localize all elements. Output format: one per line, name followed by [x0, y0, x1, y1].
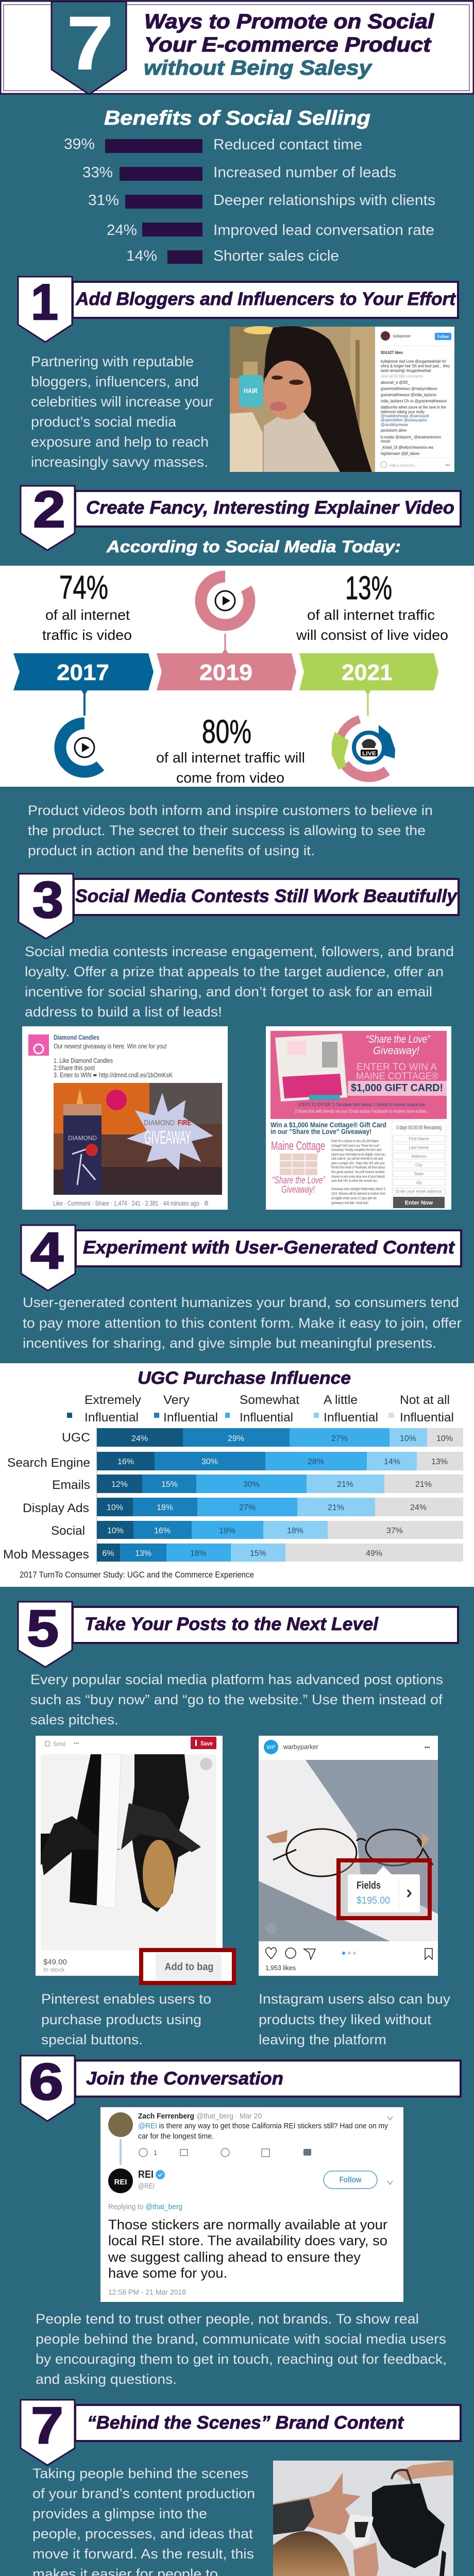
row: search engine: 13% — [431, 1458, 448, 1466]
image: maine cottage giveaway page: submit your information to be eligible. Once you — [331, 1153, 385, 1157]
influencer instagram post image: bathroom taking your molly — [381, 410, 425, 414]
image: maine cottage giveaway page: 0 days 00:00:00 Remaining — [396, 1125, 442, 1131]
row: social: 10% — [107, 1527, 124, 1535]
image: maine cottage giveaway page: Address — [411, 1154, 427, 1159]
section 6 text: and asking questions. — [36, 2371, 177, 2387]
image: tweet conversation: Those stickers are normally available at your — [108, 2217, 387, 2232]
row: search engine: 30% — [201, 1458, 218, 1466]
image: maine cottage giveaway page: Zip — [416, 1180, 422, 1185]
image: instagram shopping post: ••• — [425, 1745, 430, 1751]
chart legend: A little — [324, 1393, 358, 1407]
chart legend: Influential — [163, 1411, 218, 1425]
image: tweet conversation: Follow — [339, 2176, 362, 2184]
section 5 banner: Take Your Posts to the Next Level — [84, 1614, 379, 1634]
section 7 text: move it forward. As the result, this — [32, 2546, 254, 2562]
image: tweet conversation: @that_berg · Mar 20 — [196, 2112, 262, 2121]
benefits bar chart: Shorter sales cicle — [213, 248, 339, 264]
image: maine cottage giveaway page: Giveaway! Simply complete the form and — [331, 1148, 381, 1152]
influencer instagram post image: kyliejenner — [393, 334, 411, 338]
benefits bar chart: Deeper relationships with clients — [213, 192, 435, 209]
image: maine cottage giveaway page: Enter Now — [405, 1200, 433, 1206]
row labels: UGC — [62, 1431, 90, 1445]
row labels: Display Ads — [23, 1501, 89, 1515]
image: maine cottage giveaway page: in our "Share the Love" Giveaway! — [270, 1127, 371, 1136]
influencer instagram post image: @randkitymeow — [381, 422, 408, 427]
row: search engine: 16% — [117, 1458, 134, 1466]
main title — [144, 10, 434, 79]
caption: pinterest: special buttons. — [41, 2032, 143, 2047]
influencer instagram post image: ••• — [445, 463, 450, 468]
benefits bar chart: Improved lead conversation rate — [213, 222, 434, 239]
image: tweet conversation: car for the longest time. — [138, 2132, 214, 2141]
section 7 text: people, processes, and ideas that — [32, 2526, 253, 2541]
image: diamond candles giveaway post: DIAMOND — [144, 1118, 175, 1127]
image: tweet conversation: have some for you. — [108, 2265, 227, 2281]
row: mob messages: 15% — [250, 1549, 266, 1558]
influencer instagram post image: b.rosdas @slayann_ @amairantrevino — [381, 435, 441, 439]
row labels: Search Engine — [7, 1456, 90, 1470]
image: diamond candles giveaway post: GIVEAWAY — [144, 1127, 191, 1148]
row: social — [97, 1521, 463, 1539]
row labels — [3, 1431, 90, 1562]
section 1 banner: Add Bloggers and Influencers to Your Effort — [75, 289, 456, 309]
influencer instagram post image: graciematthewsxx @india_taylorxx — [381, 393, 436, 397]
stat 74% — [42, 569, 132, 643]
image: maine cottage giveaway page: uses that URL to enter the contest too. — [331, 1179, 378, 1183]
section 2 text: the product. The secret to their success is allowing to see the — [28, 823, 426, 838]
image: instagram shopping post: Fields — [357, 1880, 381, 1891]
row: mob messages: 18% — [190, 1549, 207, 1558]
section 7 text — [32, 2466, 255, 2576]
row: social: 37% — [386, 1527, 403, 1535]
section 7 banner: “Behind the Scenes” Brand Content — [87, 2413, 404, 2433]
chart legend: Influential — [84, 1411, 139, 1425]
main title: Your E-commerce Product — [144, 33, 432, 56]
icon: 2017 video donut — [60, 690, 100, 772]
image: instagram shopping post: 1,953 likes — [265, 1964, 296, 1972]
row: emails: 21% — [337, 1480, 353, 1489]
image: diamond candles giveaway post: 2.Share this post — [54, 1064, 95, 1072]
row: UGC: 27% — [331, 1434, 348, 1443]
chart legend: Influential — [240, 1411, 293, 1425]
caption: instagram: Instagram users also can buy — [259, 1991, 451, 2007]
section 4 banner: Experiment with User-Generated Content — [83, 1238, 455, 1258]
image: maine cottage giveaway page: chance to win every time one of your friends — [331, 1175, 385, 1179]
section 3 text — [25, 944, 454, 1020]
influencer instagram post image: peckstorm dime — [381, 428, 407, 433]
image: tweet conversation — [100, 2107, 403, 2302]
image: maine cottage giveaway page: Giveaway! — [373, 1045, 419, 1057]
section 6 text: by encouraging them to get in touch, reaching out for feedback, — [36, 2351, 447, 2367]
image: maine cottage giveaway page: Giveaway ends midnight Wednesday, March 5, — [331, 1188, 386, 1191]
stat 13% — [296, 569, 448, 643]
section 5 text: Every popular social media platform has advanced post options — [30, 1672, 443, 1687]
main title: without Being Salesy — [144, 57, 373, 79]
row: display ads: 18% — [157, 1503, 173, 1512]
image: diamond candles giveaway post: Diamond Candles — [54, 1033, 99, 1041]
image: maine cottage giveaway page: all eligible entries seven (7) days after the — [331, 1197, 377, 1200]
image: tweet conversation: REI — [114, 2178, 127, 2187]
row: emails: 30% — [243, 1480, 260, 1489]
image: maine cottage giveaway page: State — [414, 1172, 424, 1176]
section 1 banner — [18, 274, 458, 342]
benefits bar chart: Reduced contact time — [213, 137, 362, 153]
stat 13%: of all internet traffic — [307, 607, 435, 623]
section 6 banner — [21, 2053, 461, 2121]
section 1 text: increasingly savvy masses. — [31, 454, 208, 470]
row: display ads: 24% — [410, 1503, 427, 1512]
image: diamond candles giveaway post: DIAMOND — [68, 1134, 97, 1142]
image: tweet conversation: we suggest calling ahead to ensure they — [108, 2249, 361, 2265]
row: social: 16% — [154, 1527, 171, 1535]
image: pinterest buyable pin: Add to bag — [165, 1961, 213, 1973]
video stats timeline panel — [0, 566, 474, 787]
influencer instagram post image: Follow — [437, 334, 449, 339]
image: diamond candles giveaway post: Like · Comment · Share · 1,474 · 241 · 2,381 · 44 minutes ago · ⚙ — [53, 1199, 209, 1207]
image: tweet conversation: @REI is there any way to get those California REI stickers still? Had one on my — [138, 2122, 388, 2130]
image: instagram shopping post: $195.00 — [357, 1895, 390, 1906]
section 7 banner — [21, 2397, 461, 2465]
chart legend: Not at all — [400, 1393, 450, 1407]
influencer instagram post image: mood — [381, 439, 390, 444]
section 1 text: product’s social media — [31, 414, 176, 430]
stat 80%: of all internet traffic will — [156, 750, 305, 766]
section 4 banner: 4 — [30, 1222, 63, 1280]
section 5 text: such as “buy now” and “go to the website.” Use them instead of — [30, 1692, 443, 1707]
benefits bar chart: 31% — [88, 192, 119, 209]
caption: pinterest: Pinterest enables users to — [41, 1991, 211, 2007]
section 3 text: Social media contests increase engagement, followers, and brand — [25, 944, 454, 959]
caption: instagram: leaving the platform — [259, 2032, 386, 2047]
section 3 text: address to build a list of leads! — [25, 1004, 222, 1020]
image: tweet conversation: Replying to @that_berg — [108, 2202, 182, 2211]
image: maine cottage giveaway page: First Name — [409, 1137, 429, 1141]
image: maine cottage giveaway page: Maine Cottage — [271, 1139, 325, 1153]
row: mob messages — [97, 1544, 463, 1562]
arrow 2021 — [299, 653, 438, 690]
section 6 text: people behind the brand, communicate with social media users — [36, 2331, 446, 2347]
caption: pinterest — [41, 1991, 211, 2047]
image: diamond candles giveaway post: 1. Like Diamond Candles — [54, 1057, 113, 1064]
image: maine cottage giveaway page: Cottage® Gift Card in our "Share the Love" — [331, 1144, 380, 1148]
chart legend: Influential — [324, 1411, 378, 1425]
image: tweet conversation: 12:58 PM - 21 Mar 2018 — [108, 2288, 186, 2297]
arrow 2019: 2019 — [199, 660, 252, 685]
section 3 text: loyalty. Offer a prize that appeals to the target audience, offer an — [25, 964, 444, 979]
stat 80%: come from video — [176, 770, 284, 786]
header panel — [1, 1, 473, 94]
row: mob messages: 49% — [366, 1549, 382, 1558]
section 7 banner: 7 — [31, 2397, 63, 2454]
image: maine cottage giveaway page: 3 Share link with friends via your Email and/or Facebook to receive more entries. — [295, 1109, 428, 1114]
influencer instagram post image — [230, 326, 454, 472]
image: tweet conversation: local REI store. The availability does vary, so — [108, 2233, 387, 2248]
section 3 banner — [19, 871, 459, 939]
section 3 banner: Social Media Contests Still Work Beautifully — [75, 886, 458, 906]
image: diamond candles giveaway post — [22, 1026, 228, 1210]
section 1 text: bloggers, influencers, and — [31, 374, 199, 389]
image: pinterest buyable pin — [36, 1736, 236, 1985]
section 7 text: provides a glimpse into the — [32, 2506, 207, 2521]
stat 74%: of all internet — [45, 607, 130, 623]
image: maine cottage giveaway page: friends thru email or Facebook, tell them about — [331, 1166, 385, 1170]
stat 74%: 74% — [59, 569, 108, 606]
arrow 2017 — [13, 653, 154, 690]
section 5 text: sales pitches. — [30, 1712, 118, 1727]
benefits heading: Benefits of Social Selling — [104, 107, 370, 129]
row: UGC: 10% — [400, 1434, 416, 1443]
row: UGC: 29% — [228, 1434, 244, 1443]
section 7 text: of your brand’s content production — [32, 2486, 255, 2501]
image: diamond candles giveaway post: 3. Enter to WIN ➨ http://dmnd.cndl.es/1bOmKsK — [54, 1071, 173, 1079]
image: maine cottage giveaway page: MAINE COTTAGE® — [356, 1071, 438, 1082]
image: maine cottage giveaway page: STEPS TO ENTER: 1 Complete form below. 2 Submit to receive unique link. — [298, 1102, 426, 1107]
section 1 text: Partnering with reputable — [31, 353, 194, 369]
section 2 banner — [21, 481, 461, 550]
row: search engine — [97, 1452, 463, 1470]
image: tweet conversation: @REI — [138, 2182, 155, 2191]
section 4 banner — [21, 1222, 461, 1291]
row: display ads — [97, 1498, 463, 1516]
row: UGC — [97, 1428, 463, 1447]
image: behind the scenes photo — [273, 2461, 453, 2576]
image: tweet conversation: Zach Ferrenberg — [138, 2112, 194, 2121]
influencer instagram post image: highlamsam @jill_labow — [381, 451, 419, 456]
section 1 text — [31, 353, 213, 470]
influencer instagram post image: india_tayloexx Oh xx @graciematthewsxx — [381, 399, 447, 403]
image: maine cottage giveaway page: ENTER TO WIN A — [357, 1062, 437, 1073]
image: tweet conversation: REI — [138, 2169, 154, 2180]
image: pinterest buyable pin: Save — [200, 1740, 213, 1747]
arrow 2017: 2017 — [57, 660, 109, 685]
influencer instagram post image: aboorah_e @35f_ — [381, 380, 410, 385]
influencer instagram post image: dabburrito when youre at the rave in the — [381, 405, 446, 410]
arrow 2021: 2021 — [342, 660, 393, 685]
panel: ugc purchase influence — [0, 1363, 474, 1587]
influencer instagram post image: _kristal_18 @kellyncheavarria vea — [380, 445, 433, 450]
influencer instagram post image: HAIR — [244, 387, 258, 395]
row: search engine: 14% — [384, 1458, 400, 1466]
row: display ads: 10% — [107, 1503, 123, 1512]
section 6 text: People tend to trust other people, not brands. To show real — [36, 2311, 419, 2327]
section 2 text: Product videos both inform and inspire customers to believe in — [28, 803, 433, 818]
benefits bar chart: 24% — [107, 222, 137, 239]
influencer instagram post image: view all 50,999 comments — [381, 374, 423, 379]
benefits bar chart: 14% — [126, 248, 157, 264]
row: display ads: 21% — [328, 1503, 344, 1512]
section 1 text: celebrities will increase your — [31, 394, 213, 410]
image: instagram shopping post: WP — [266, 1744, 276, 1751]
benefits bar chart — [64, 136, 435, 264]
stat 74%: traffic is video — [42, 627, 132, 643]
section 4 text: User-generated content humanizes your brand, so consumers tend — [23, 1295, 459, 1310]
header ribbon with number 7 — [52, 1, 126, 94]
chart legend: Very — [163, 1393, 190, 1407]
row: mob messages: 6% — [102, 1549, 114, 1558]
image: maine cottage giveaway page: 2014. Winners will be selected at random from — [331, 1192, 385, 1196]
chart axis line — [96, 1427, 97, 1564]
section 2 text: product in action and the benefits of using it. — [28, 843, 315, 858]
row: social: 18% — [287, 1527, 303, 1535]
section 1 banner: 1 — [31, 274, 58, 330]
influencer instagram post image: graciematthewsxx @maisyrobbsxx — [381, 386, 437, 391]
influencer instagram post image: taste amazing! #sugarbearhair — [381, 368, 431, 373]
stacked bars — [97, 1428, 463, 1562]
row: emails: 21% — [415, 1480, 432, 1489]
row: emails: 12% — [111, 1480, 128, 1489]
row: mob messages: 13% — [135, 1549, 151, 1558]
section 2 banner: 2 — [33, 481, 65, 538]
image: instagram shopping post — [259, 1736, 438, 1976]
image: pinterest buyable pin: ••• — [74, 1741, 79, 1747]
benefits bar chart: 39% — [64, 136, 95, 152]
row: search engine: 28% — [308, 1458, 324, 1466]
benefits bar chart: 33% — [82, 164, 113, 181]
benefits bar chart: Increased number of leads — [213, 164, 396, 181]
influencer instagram post image: 924,627 likes — [381, 350, 403, 355]
image: pinterest buyable pin: $49.00 — [43, 1958, 67, 1967]
section 6 banner: 6 — [29, 2053, 63, 2111]
section 5 text — [30, 1672, 443, 1727]
row: UGC: 10% — [436, 1434, 453, 1443]
section 4 text: incentives for sharing, and give simple but meaningful presents. — [23, 1335, 436, 1351]
row labels: Social — [51, 1524, 85, 1538]
chart title: UGC Purchase Influence — [138, 1368, 351, 1388]
image: maine cottage giveaway page: Last Name — [409, 1145, 429, 1150]
section 4 text: to pay more attention to this content form. Make it easy to join, offer — [23, 1315, 462, 1331]
section 3 banner: 3 — [32, 871, 63, 929]
section 5 banner: 5 — [27, 1600, 59, 1657]
icon: 2019 video donut — [201, 577, 249, 653]
image: maine cottage giveaway page: “Share the Love” — [272, 1175, 326, 1186]
image: maine cottage giveaway page: $1,000 GIFT CARD! — [351, 1082, 443, 1094]
influencer instagram post image: Add a comment... — [390, 463, 417, 468]
image: maine cottage giveaway page: click submit, you will be entered to win and — [331, 1157, 383, 1161]
row: UGC: 24% — [131, 1434, 148, 1443]
caption: instagram: products they liked without — [259, 2012, 432, 2027]
row: emails — [97, 1475, 463, 1493]
icon: 2021 live donut: LIVE — [362, 751, 376, 757]
image: maine cottage giveaway page: given a unique URL. Share that URL with your — [331, 1162, 385, 1165]
section 2 banner: Create Fancy, Interesting Explainer Video — [86, 498, 454, 518]
image: maine cottage giveaway page — [266, 1026, 451, 1210]
row: social: 19% — [219, 1527, 235, 1535]
section 1 text: exposure and help to reach — [31, 434, 209, 450]
icon: 2021 live donut — [332, 690, 395, 777]
caption: instagram — [259, 1991, 451, 2047]
image: diamond candles giveaway post: Our newest giveaway is here. Win one for you! — [54, 1042, 167, 1050]
chart legend — [67, 1393, 454, 1425]
influencer instagram post image: shiny & longer hair Oh and best part... they — [381, 364, 450, 368]
section 3 text: incentive for social sharing, and don’t forget to ask for an email — [25, 984, 432, 999]
image: pinterest buyable pin: Send — [53, 1740, 65, 1748]
image: maine cottage giveaway page: “Share the Love” — [366, 1033, 430, 1045]
image: maine cottage giveaway page: this great contest. You will receive another — [331, 1171, 385, 1174]
section 6 text — [36, 2311, 447, 2387]
main title: Ways to Promote on Social — [144, 10, 434, 33]
arrow 2019 — [157, 653, 296, 690]
section 5 banner — [18, 1600, 458, 1667]
subheading: according to social media today: According to Social Media Today: — [106, 537, 401, 556]
chart legend: Extremely — [84, 1393, 141, 1407]
image: tweet conversation: 1 — [154, 2149, 157, 2157]
row: display ads: 27% — [239, 1503, 256, 1512]
section 4 text — [23, 1295, 462, 1351]
stat 80% — [156, 713, 305, 786]
chart legend: Somewhat — [240, 1393, 299, 1407]
stat 13%: will consist of live video — [296, 627, 448, 643]
image: maine cottage giveaway page: Enter for a chance to win a $1,000 Maine — [331, 1140, 379, 1143]
influencer instagram post image: @spinnkitten @soneyspinz — [381, 418, 427, 422]
section 2 text — [28, 803, 433, 858]
image: maine cottage giveaway page: City — [415, 1163, 422, 1167]
stat 80%: 80% — [202, 713, 251, 750]
row labels: Mob Messages — [3, 1548, 89, 1562]
image: pinterest buyable pin: In stock — [43, 1966, 65, 1973]
row: emails: 15% — [161, 1480, 178, 1489]
influencer instagram post image: @madelinehoops @samsusott — [381, 414, 430, 418]
chart source: 2017 TurnTo Consumer Study: UGC and the Commerce Experience — [20, 1570, 254, 1580]
image: maine cottage giveaway page: giveaway's end date. Good luck! — [331, 1201, 368, 1205]
chart legend: Influential — [400, 1411, 454, 1425]
influencer instagram post image: kyliejenner #ad Love @sugarbearhair for — [381, 359, 446, 364]
stat 13%: 13% — [345, 569, 392, 606]
image: instagram shopping post: warbyparker — [283, 1743, 319, 1751]
section 7 text: Taking people behind the scenes — [32, 2466, 248, 2481]
image: maine cottage giveaway page: Enter your email address — [396, 1189, 442, 1194]
image: diamond candles giveaway post: FIRE — [178, 1118, 191, 1127]
caption: pinterest: purchase products using — [41, 2012, 201, 2027]
header ribbon with number 7: 7 — [67, 1, 113, 85]
section 6 banner: Join the Conversation — [86, 2069, 283, 2089]
image: maine cottage giveaway page: Win a $1,000 Maine Cottage® Gift Card — [270, 1121, 386, 1129]
image: maine cottage giveaway page: Giveaway! — [281, 1184, 315, 1195]
row labels: Emails — [52, 1478, 90, 1492]
